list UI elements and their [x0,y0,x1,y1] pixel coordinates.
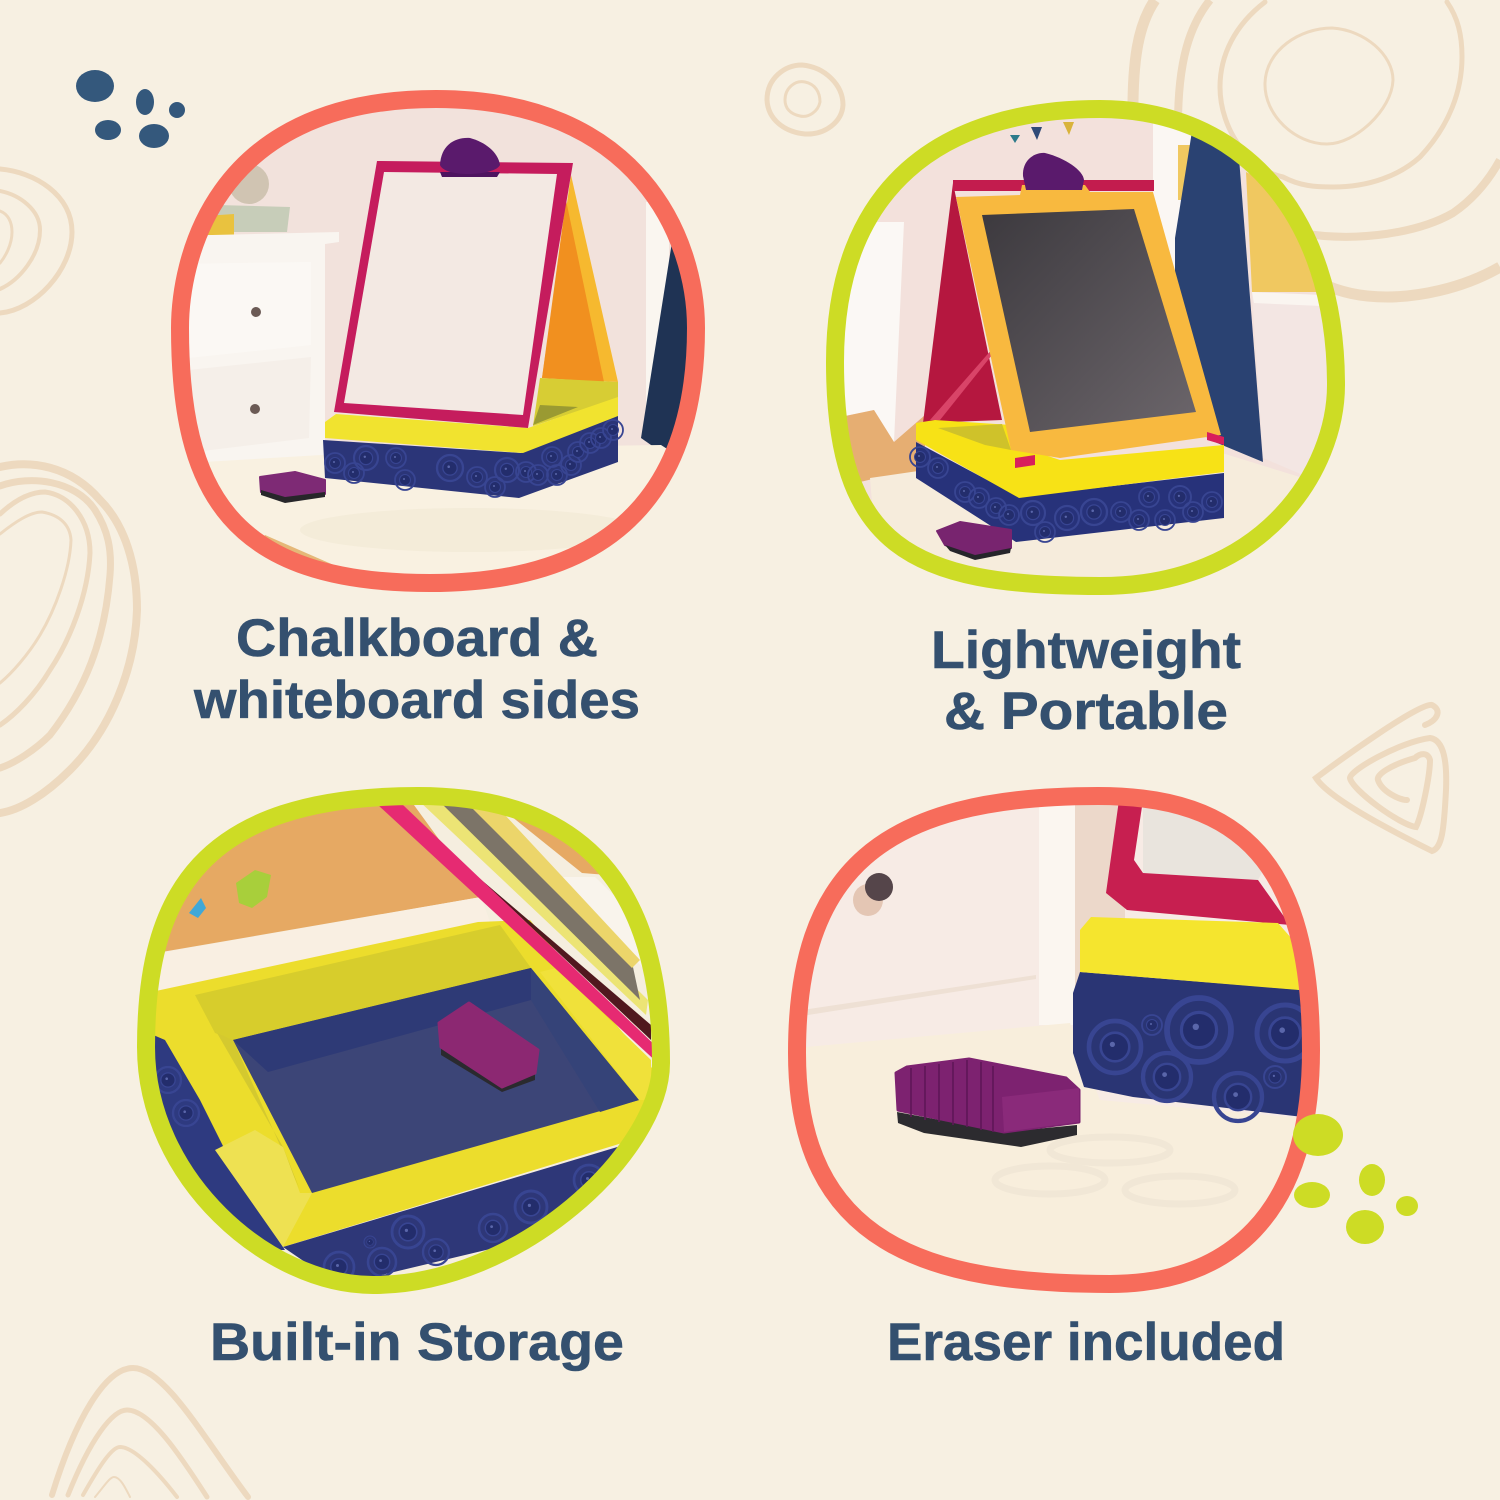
photo: easel chalkboard side [844,118,1327,560]
heading: chalkboard and whiteboard sides: whiteboard sides [193,671,640,730]
panel: built-in storage [137,787,670,1372]
blob outline: lime [146,796,661,1285]
heading: lightweight and portable: Lightweight [931,621,1241,680]
icon: lime dot cluster [1293,1114,1418,1244]
photo: eraser close-up [808,805,1302,1208]
heading: chalkboard and whiteboard sides: Chalkboard & [236,609,598,668]
icon: navy dot cluster [76,70,185,148]
heading: eraser included: Eraser included [887,1313,1285,1372]
heading: lightweight and portable: & Portable [944,682,1228,741]
heading: lightweight and portable [931,621,1241,741]
photo: open storage tray [155,805,652,1276]
panel: chalkboard and whiteboard sides [170,90,710,730]
heading: chalkboard and whiteboard sides [193,609,640,730]
blob outline: coral [797,796,1311,1284]
panel: eraser included [789,787,1322,1372]
blob outline: coral [180,99,696,583]
photo: easel whiteboard side [189,108,687,564]
blob outline: lime [835,109,1336,586]
panel: lightweight and portable [826,100,1346,741]
heading: built-in storage: Built-in Storage [210,1313,624,1372]
